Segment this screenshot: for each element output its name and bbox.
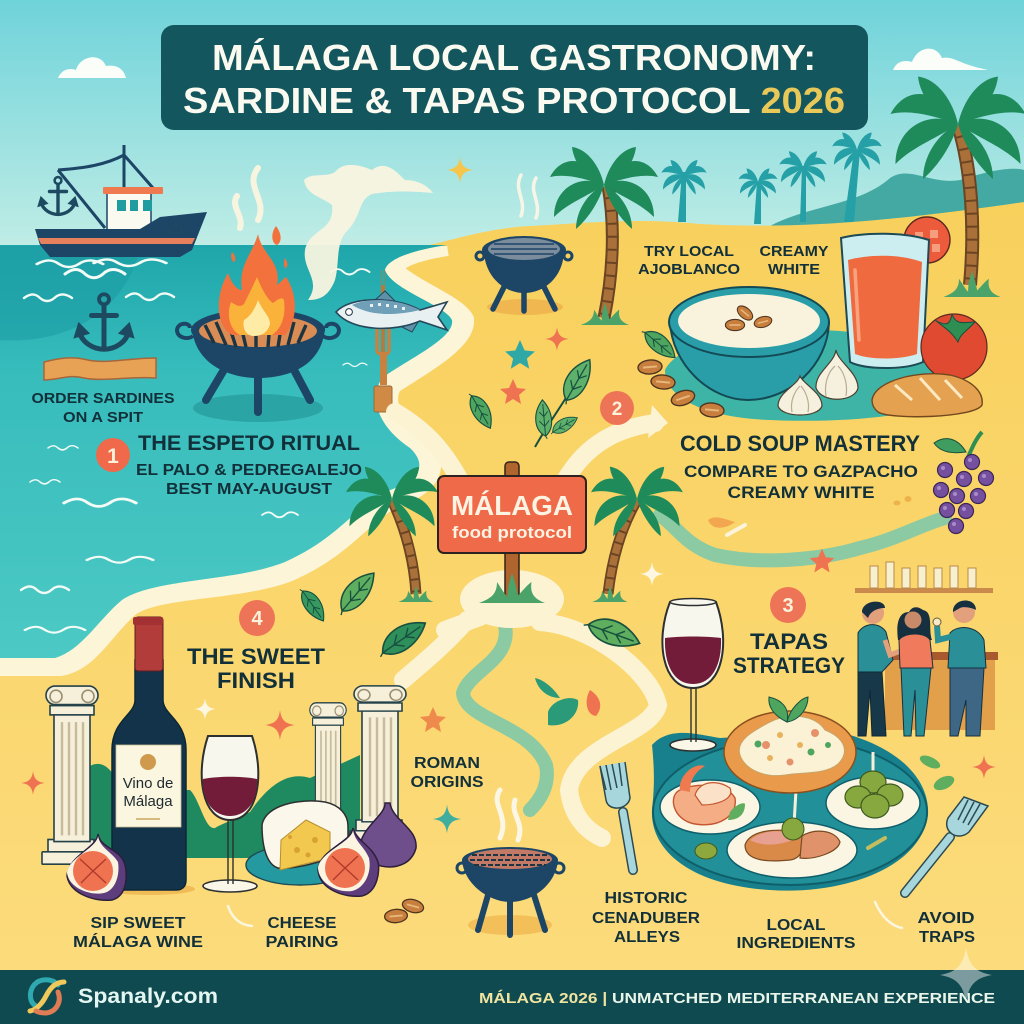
steam 2 bbox=[518, 175, 538, 218]
olives and sparkle bbox=[918, 753, 996, 793]
cloud: left bbox=[58, 57, 126, 78]
column 1 bbox=[42, 686, 100, 864]
title banner: SARDINE & TAPAS PROTOCOL 2026 bbox=[183, 80, 845, 121]
text: cheese pairing: CHEESE bbox=[268, 915, 337, 932]
text: creamy white: CREAMY bbox=[760, 243, 828, 260]
text: local ingredients: LOCAL bbox=[766, 917, 826, 934]
bowl of ajoblanco bbox=[669, 287, 829, 400]
column 3 bbox=[350, 686, 408, 842]
column 2 bbox=[307, 703, 348, 841]
text: sip sweet malaga wine: SIP SWEET bbox=[90, 915, 186, 932]
footer bar bbox=[0, 970, 1024, 1024]
text: avoid traps: AVOID bbox=[918, 910, 974, 927]
heading: the sweet finish bbox=[187, 644, 326, 693]
tomato slice bbox=[904, 217, 950, 263]
sparkles and stars lower-left bbox=[21, 698, 461, 833]
number badge 4 bbox=[239, 600, 275, 636]
scattered food crumbs bbox=[708, 496, 912, 535]
teal table mat bbox=[665, 329, 960, 421]
grill 2 bbox=[476, 236, 572, 315]
almonds and leaf bbox=[637, 324, 725, 418]
text: el palo and pedregalejo: EL PALO & PEDREGALEJO bbox=[136, 462, 362, 479]
steam 3 bbox=[497, 790, 520, 840]
sparkle white and star bbox=[640, 549, 834, 586]
text: sip sweet malaga wine bbox=[73, 915, 203, 951]
text: creamy white bbox=[760, 243, 828, 278]
sparkle watermark bbox=[940, 948, 992, 1002]
smoke cloud bbox=[304, 165, 433, 300]
bread bbox=[872, 374, 982, 417]
small garnish on plate bbox=[695, 838, 885, 859]
heading: the espeto ritual: THE ESPETO RITUAL bbox=[138, 432, 360, 455]
steam: above grill bbox=[235, 168, 261, 228]
text: local ingredients bbox=[736, 917, 856, 952]
paella bbox=[724, 697, 856, 793]
small teal palms bbox=[661, 133, 882, 224]
green path: lower bbox=[463, 625, 547, 810]
fork: right bbox=[905, 797, 988, 893]
fork: left bbox=[600, 762, 633, 870]
text: sip sweet malaga wine: MÁLAGA WINE bbox=[73, 932, 203, 951]
grill with flame bbox=[177, 226, 339, 422]
number badge 3 bbox=[770, 587, 806, 623]
bar counter bbox=[882, 652, 998, 730]
sign: Málaga food protocol bbox=[438, 462, 586, 603]
icon: fishing boat bbox=[35, 145, 207, 257]
text: try local ajoblanco bbox=[638, 243, 740, 278]
wine bottle bbox=[105, 617, 195, 895]
almonds bottom bbox=[384, 897, 425, 924]
cream path network bbox=[395, 412, 658, 838]
text: avoid traps bbox=[918, 910, 975, 946]
text: roman origins: ROMAN bbox=[414, 755, 480, 772]
leaves around sign bbox=[295, 566, 644, 664]
sign: Málaga food protocol: food protocol bbox=[452, 523, 572, 542]
text: creamy white: WHITE bbox=[768, 261, 820, 278]
footer tagline: MÁLAGA 2026 | UNMATCHED MEDITERRANEAN EXPERIENCE bbox=[479, 990, 995, 1007]
palm tree: upper centre bbox=[550, 147, 658, 325]
text: roman origins: ORIGINS bbox=[410, 774, 484, 791]
text: historic alleys bbox=[592, 890, 700, 946]
path ring at sign base bbox=[460, 570, 564, 628]
footer logo bbox=[30, 980, 64, 1013]
number badge 2 bbox=[600, 391, 634, 425]
title banner: MÁLAGA LOCAL GASTRONOMY: bbox=[212, 37, 816, 78]
cream arc near traps bbox=[875, 902, 902, 928]
cream arc near cheese bbox=[228, 906, 252, 926]
text: try local ajoblanco: TRY LOCAL bbox=[644, 243, 734, 260]
footer brand: Spanaly.com bbox=[78, 985, 218, 1008]
plants and stars centre bbox=[464, 327, 598, 447]
text: avoid traps: TRAPS bbox=[919, 929, 975, 946]
fig: cut left bbox=[67, 834, 126, 900]
text: el palo and pedregalejo bbox=[136, 462, 362, 498]
green bushes bbox=[85, 755, 360, 858]
grill 3 bbox=[457, 847, 564, 935]
text: historic alleys: CENADUBER bbox=[592, 910, 700, 927]
text: el palo and pedregalejo: BEST MAY-AUGUST bbox=[166, 481, 332, 498]
bottle label bbox=[116, 745, 181, 827]
shrimp plate bbox=[660, 765, 760, 834]
waves bbox=[21, 259, 370, 633]
hills bbox=[770, 169, 1024, 240]
text: compare to gazpacho bbox=[684, 462, 918, 502]
sparkle: yellow bbox=[447, 157, 473, 183]
heading: the sweet finish: THE SWEET bbox=[187, 644, 326, 669]
olive plate bbox=[826, 752, 920, 829]
number badge 4: 4 bbox=[251, 608, 263, 630]
icon: wooden plank bbox=[44, 358, 156, 380]
cloud: right bbox=[893, 49, 988, 70]
grapes bbox=[934, 432, 994, 534]
people at bar bbox=[858, 600, 986, 736]
sea darker shade bbox=[0, 246, 140, 340]
fig: cut right bbox=[318, 828, 379, 896]
heading: tapas strategy: TAPAS bbox=[750, 629, 828, 654]
number badge 3: 3 bbox=[782, 595, 794, 617]
tapa plate bbox=[727, 790, 857, 878]
foliage cluster bbox=[535, 678, 600, 725]
number badge 1 bbox=[96, 438, 130, 472]
sea bbox=[0, 245, 452, 658]
text: roman origins bbox=[410, 755, 484, 791]
text: try local ajoblanco: AJOBLANCO bbox=[638, 261, 740, 278]
wine glass: left bbox=[202, 736, 258, 892]
text: order sardines: ON A SPIT bbox=[63, 409, 143, 426]
text: order sardines bbox=[32, 390, 174, 426]
sky bbox=[0, 0, 1024, 260]
heading: tapas strategy bbox=[733, 629, 845, 678]
bottle label: Vino de bbox=[123, 775, 173, 792]
garlic bbox=[778, 350, 858, 415]
text: order sardines: ORDER SARDINES bbox=[32, 390, 174, 407]
glass of gazpacho bbox=[841, 234, 929, 368]
foam shoreline bbox=[0, 245, 463, 665]
heading: the sweet finish: FINISH bbox=[217, 668, 295, 693]
green path: upper bbox=[660, 515, 945, 560]
palm tree: right of sign bbox=[591, 467, 683, 602]
big tapas plate bbox=[652, 697, 928, 891]
number badge 1: 1 bbox=[107, 445, 119, 468]
cheese bbox=[246, 801, 354, 885]
heading: cold soup mastery: COLD SOUP MASTERY bbox=[680, 431, 920, 456]
text: compare to gazpacho: COMPARE TO GAZPACHO bbox=[684, 462, 918, 481]
palm tree: upper right bbox=[890, 76, 1024, 297]
flame bbox=[219, 226, 295, 336]
text: cheese pairing: PAIRING bbox=[266, 934, 338, 951]
text: cheese pairing bbox=[266, 915, 338, 951]
wine glass: right bbox=[662, 598, 723, 751]
text: historic alleys: HISTORIC bbox=[604, 890, 688, 907]
heading: tapas strategy: STRATEGY bbox=[733, 653, 845, 678]
bar shelf with bottles bbox=[855, 562, 993, 593]
text: historic alleys: ALLEYS bbox=[614, 929, 680, 946]
title banner bbox=[161, 25, 868, 130]
sign: Málaga food protocol: MÁLAGA bbox=[451, 490, 573, 521]
fig: whole bbox=[360, 803, 416, 867]
text: compare to gazpacho: CREAMY WHITE bbox=[728, 483, 874, 502]
bottle label: Málaga bbox=[123, 793, 173, 810]
tomato bbox=[921, 314, 987, 380]
number badge 2: 2 bbox=[612, 399, 622, 420]
text: local ingredients: INGREDIENTS bbox=[736, 935, 856, 952]
icon: sardine on a spit bbox=[336, 270, 447, 412]
arrow head on path 2 bbox=[648, 405, 668, 438]
palm tree: left of sign bbox=[346, 467, 438, 602]
icon: anchor in the water bbox=[75, 294, 133, 349]
